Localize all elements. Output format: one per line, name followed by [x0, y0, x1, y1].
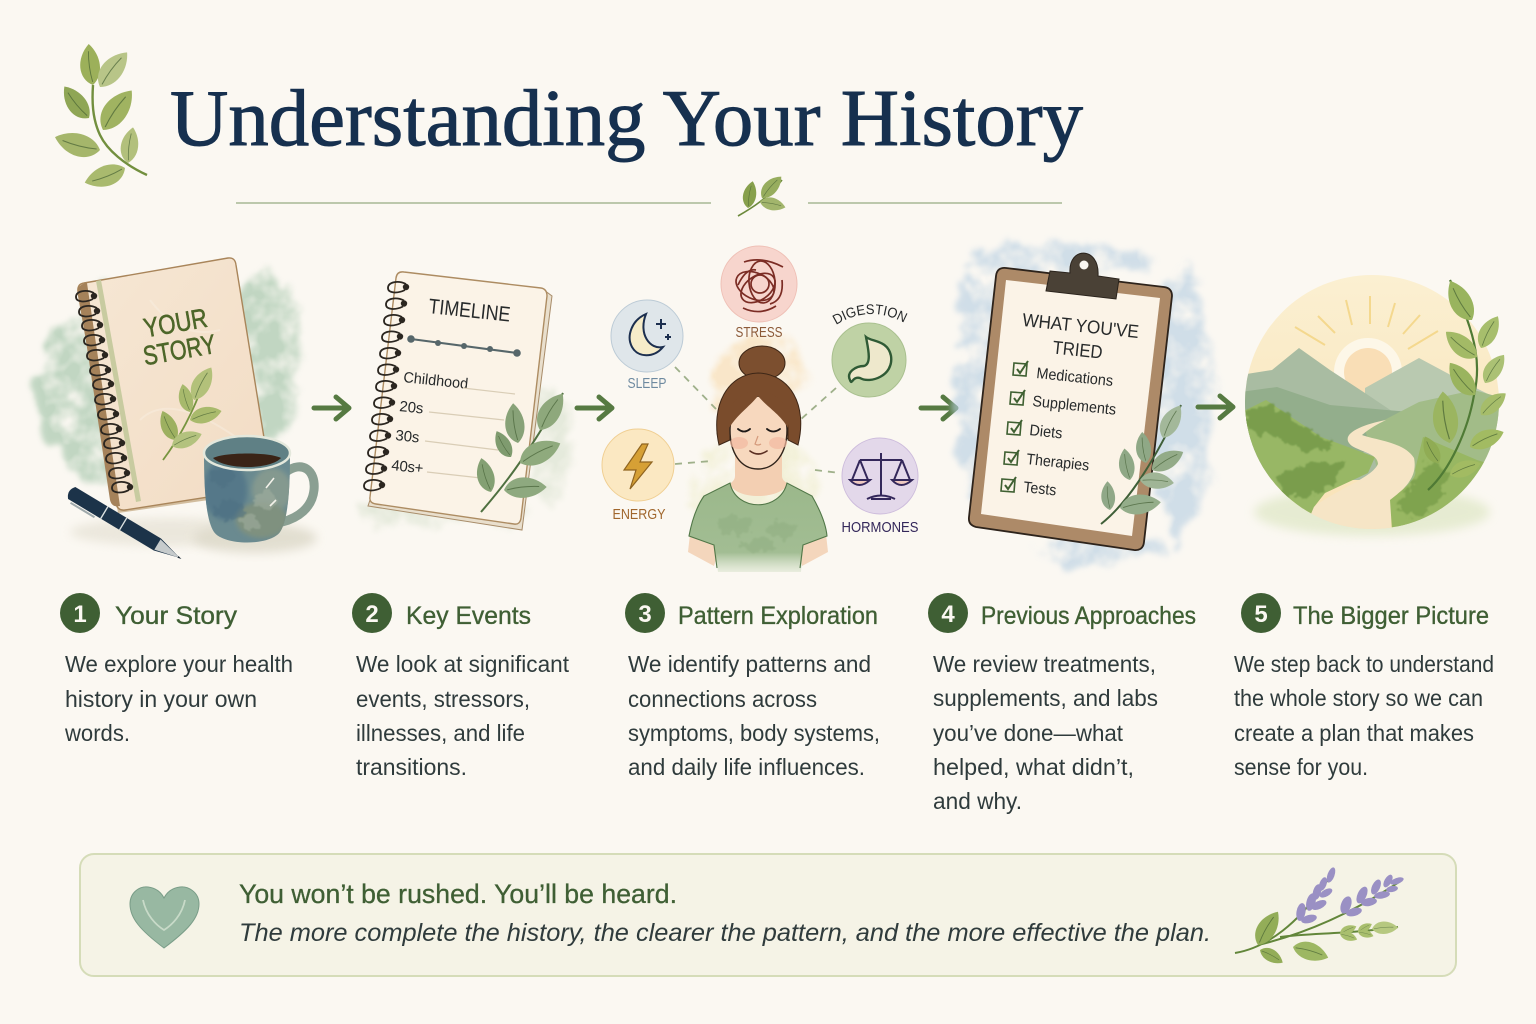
- right foreground hill: [1390, 437, 1484, 528]
- right pale hill: [1366, 390, 1499, 527]
- step 2: [352, 593, 570, 780]
- illustration 2: timeline notebook: [355, 272, 572, 530]
- left hill: [1245, 400, 1375, 514]
- description: illnesses, and life: [356, 720, 525, 746]
- icon: sleep: [611, 300, 683, 372]
- clip: [1046, 253, 1119, 299]
- description: transitions.: [356, 754, 467, 780]
- arrow 1: [314, 397, 349, 419]
- sun rays: [1295, 296, 1438, 349]
- step 3: [625, 593, 880, 780]
- step 4: [928, 593, 1196, 814]
- illustration 4: clipboard: [957, 240, 1212, 564]
- description: [933, 651, 1158, 814]
- paper: [981, 280, 1160, 536]
- timeline labels: 30s: [395, 427, 420, 446]
- person: [688, 346, 828, 572]
- page heading: TIMELINE: [427, 295, 511, 327]
- description: [628, 651, 880, 780]
- description: the whole story so we can: [1234, 685, 1483, 711]
- checklist: [1001, 361, 1117, 499]
- badge: 4: [941, 601, 955, 628]
- badge: 5: [1254, 601, 1268, 628]
- description: [64, 651, 293, 746]
- description: supplements, and labs: [933, 685, 1158, 711]
- icon: digestion: [832, 323, 906, 397]
- label: ENERGY: [612, 507, 666, 523]
- spiral binding: [76, 291, 133, 492]
- wash: [957, 240, 1212, 564]
- clipboard heading: [1021, 309, 1140, 363]
- checklist: Medications: [1036, 365, 1114, 390]
- description: helped, what didn’t,: [933, 754, 1134, 780]
- arrow 3: [921, 397, 956, 419]
- board: [969, 268, 1172, 550]
- timeline labels: [391, 369, 515, 478]
- description: [1234, 651, 1494, 780]
- pen: [65, 485, 185, 567]
- label: HORMONES: [842, 520, 918, 536]
- sun: [1334, 338, 1402, 380]
- notebook title: STORY: [141, 329, 218, 371]
- mountains: [1365, 358, 1500, 470]
- notebook title: [141, 303, 218, 371]
- illustration 3: person and body-system icons: [602, 246, 918, 572]
- connector dashes: [675, 367, 840, 473]
- title: Understanding Your History: [170, 75, 1083, 163]
- description: history in your own: [65, 686, 257, 712]
- checklist: Therapies: [1026, 451, 1090, 475]
- checklist: Diets: [1029, 422, 1063, 442]
- icon: heart: [130, 887, 199, 948]
- description: sense for you.: [1234, 754, 1368, 780]
- icon: title leaf sprig: [52, 43, 147, 193]
- description: We step back to understand: [1234, 651, 1494, 677]
- description: create a plan that makes: [1234, 720, 1474, 746]
- sky: [1240, 270, 1505, 535]
- callout text: The more complete the history, the clearer the pattern, and the more effective the plan.: [239, 919, 1211, 947]
- badge: [1241, 593, 1281, 633]
- heading: The Bigger Picture: [1293, 602, 1489, 630]
- path: [1311, 420, 1415, 529]
- notebook sprig: [155, 363, 223, 460]
- description: We look at significant: [356, 651, 570, 677]
- clipboard sprig: [1100, 401, 1187, 524]
- heading: Key Events: [406, 602, 531, 630]
- watercolor wash: [37, 275, 300, 492]
- divider with sprig: [236, 172, 1062, 216]
- clipboard heading: WHAT YOU'VE: [1021, 309, 1140, 342]
- badge: [352, 593, 392, 633]
- description: you’ve done—what: [933, 720, 1124, 746]
- timeline labels: Childhood: [403, 369, 469, 393]
- label: STRESS: [736, 325, 782, 341]
- illustration 5: landscape: [1240, 270, 1510, 540]
- callout panel: [80, 854, 1456, 976]
- arrow 4: [1198, 396, 1233, 418]
- mug: [193, 436, 317, 553]
- description: symptoms, body systems,: [628, 720, 880, 746]
- checklist: Tests: [1023, 479, 1057, 499]
- badge: [928, 593, 968, 633]
- timeline labels: 20s: [399, 398, 424, 417]
- description: events, stressors,: [356, 686, 530, 712]
- label (curved): DIGESTION: [832, 304, 908, 324]
- badge: 1: [73, 601, 87, 628]
- description: We review treatments,: [933, 651, 1156, 677]
- icon: energy: [602, 429, 674, 501]
- heading: Pattern Exploration: [678, 602, 878, 630]
- notebook title: YOUR: [141, 303, 210, 343]
- heading: Previous Approaches: [981, 602, 1196, 630]
- description: words.: [64, 720, 130, 746]
- badge: [60, 593, 100, 633]
- wash: [355, 380, 572, 528]
- illustration 1: notebook and mug: [37, 258, 317, 567]
- description: We identify patterns and: [628, 651, 871, 677]
- checklist: Supplements: [1032, 393, 1117, 419]
- badge: 3: [638, 601, 652, 628]
- shadow: [70, 518, 270, 546]
- wash: [689, 333, 821, 545]
- step 1: [60, 593, 293, 746]
- notebook cover: [78, 258, 272, 513]
- description: and why.: [933, 788, 1022, 814]
- description: [356, 651, 570, 780]
- heading: Your Story: [115, 602, 238, 630]
- spiral: [364, 282, 409, 490]
- icon: stress: [721, 246, 797, 322]
- notebook page: [368, 272, 552, 530]
- description: connections across: [628, 686, 817, 712]
- callout heading: You won’t be rushed. You’ll be heard.: [239, 879, 677, 909]
- timeline labels: 40s+: [391, 457, 424, 477]
- icon: lavender sprig: [1235, 866, 1405, 968]
- timeline sprig: [472, 388, 571, 512]
- icon: hormones: [842, 438, 918, 514]
- description: We explore your health: [65, 651, 293, 677]
- vine: [1418, 276, 1510, 490]
- timeline bar: [407, 335, 521, 357]
- clipboard heading: TRIED: [1052, 336, 1104, 363]
- description: and daily life influences.: [628, 754, 865, 780]
- step 5: [1234, 593, 1494, 780]
- badge: [625, 593, 665, 633]
- arrow 2: [577, 397, 612, 419]
- badge: 2: [365, 601, 379, 628]
- label: SLEEP: [628, 376, 666, 392]
